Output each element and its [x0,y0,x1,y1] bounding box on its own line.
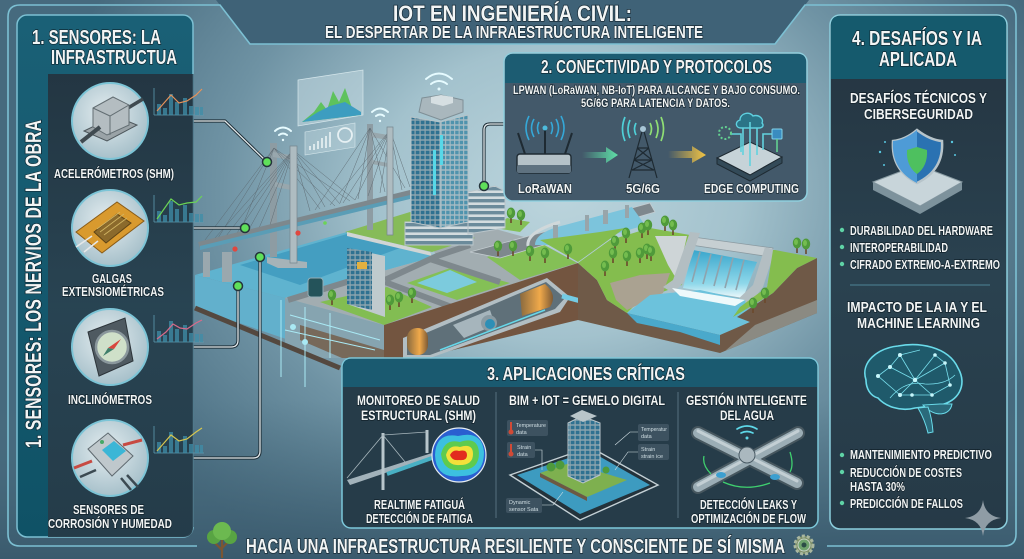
panel: 3. aplicaciones críticas [342,358,818,528]
icon: gear [795,536,813,554]
dam [655,236,687,280]
subheading: CIBERSEGURIDAD [864,106,973,123]
tall tower [405,95,473,245]
tunnel earth [384,263,578,358]
sensor: acelerómetro [72,83,148,159]
trees [328,208,810,313]
sensor: inclinómetro [72,309,148,385]
column: gestión del agua: DETECCIÓN LEAKS Y [700,497,797,512]
bridge [198,124,410,282]
heading [852,27,982,71]
subheading [850,90,987,123]
heading: APLICADA [879,49,957,71]
data tags: data [516,430,528,436]
subheading [847,299,987,332]
hill grass [578,228,690,313]
label [48,502,172,531]
conduit grid [281,300,380,387]
heading: 2. CONECTIVIDAD Y PROTOCOLOS [541,57,772,77]
annex building [468,186,505,234]
small building [347,248,385,317]
title: EL DESPERTAR DE LA INFRAESTRUCTURA INTELIGENTE [325,22,703,42]
subheading: IMPACTO DE LA IA Y EL [847,299,987,316]
panel heading [32,27,177,69]
column: SHM: MONITOREO DE SALUD [357,393,480,408]
icon: bridge with heat map [347,428,486,490]
label: LoRaWAN [518,181,572,196]
data tags: strain ice [641,454,663,460]
label: CORROSIÓN Y HUMEDAD [48,516,172,531]
data tags: sensor Sata [509,507,539,513]
column: BIM + IoT [506,393,669,520]
field sensor box [308,278,323,297]
column: gestión del agua: GESTIÓN INTELIGENTE [686,393,807,408]
data tags: data [517,452,529,458]
right bank [720,258,817,353]
data tags: Temperature [516,423,546,429]
icon: LoRaWAN router [517,116,572,173]
label: GALGAS [92,271,132,286]
title band [216,0,809,44]
bullets: IA: PREDICCIÓN DE FALLOS [850,496,963,511]
water [195,232,437,298]
floating dashboard [298,70,363,155]
column: gestión del agua: OPTIMIZACIÓN DE FLOW [691,511,807,526]
icon: tablet with digital twin [510,410,658,520]
description [513,83,800,110]
description: 5G/6G PARA LATENCIA Y DATOS. [581,96,730,110]
title [325,1,703,42]
wifi icons [275,74,452,141]
icon: smart pipes [698,426,798,487]
arrow [668,146,706,163]
column: SHM: REALTIME FATIGUÁ [374,497,465,512]
panel: 2. conectividad y protocolos [504,53,807,201]
label: EXTENSIOMÉTRICAS [62,284,164,299]
subheading: MACHINE LEARNING [857,315,980,332]
label: ACELERÓMETROS (SHM) [54,166,174,181]
column: gestión del agua: DEL AGUA [720,408,774,423]
sensor nodes [234,158,488,290]
footer [207,522,813,558]
column: gestión del agua [686,393,807,526]
column: SHM: DETECCIÓN DE FAITIGA [366,511,473,526]
arrow [582,147,618,163]
icon: neural brain [865,345,962,433]
label: INCLINÓMETROS [68,392,152,407]
description: LPWAN (LoRaWAN, NB-IoT) PARA ALCANCE Y BAJO CONSUMO. [513,83,800,97]
icon: shield on server [873,130,962,214]
panel heading: 1. SENSORES: LA [32,27,161,49]
panel heading: INFRASTRUCTUA [51,47,177,69]
column: SHM [347,393,486,526]
city ground [285,215,578,325]
panel: 4. desafíos y IA [830,15,1007,536]
connector lines from sensors to nodes [149,121,504,458]
closing statement: HACIA UNA INFRAESTRUCTURA RESILIENTE Y CONSCIENTE DE SÍ MISMA [246,535,785,558]
subheading: DESAFÍOS TÉCNICOS Y [850,90,987,107]
bullets: desafíos: INTEROPERABILIDAD [850,240,948,255]
data tags: Temperatur [641,427,667,433]
bullets: IA [840,447,992,511]
sensor: corrosión y humedad [72,420,148,496]
column: BIM + IoT: BIM + IOT = GEMELO DIGITAL [509,393,665,408]
rocks [610,273,670,310]
data tags: Dynamic [509,500,531,506]
icon: 5G tower [622,117,664,178]
label: SENSORES DE [73,502,144,517]
icon: sparkle [965,500,1001,536]
data tags: Strain [641,447,655,453]
icon: tree [207,522,237,558]
label: 5G/6G [626,181,660,196]
icon: edge computing [717,113,782,181]
heading: 3. APLICACIONES CRÍTICAS [487,363,685,384]
central illustration: smart city, bridge, tunnel and dam [195,70,817,387]
column: SHM: ESTRUCTURAL (SHM) [361,408,476,423]
bullets: IA: HASTA 30% [850,479,905,494]
data tags [506,420,669,513]
side heading: 1. SENSORES: LOS NERVIOS DE LA OBRA [21,120,46,448]
sensor: galga [72,190,148,266]
title: IOT EN INGENIERÍA CIVIL: [393,1,632,26]
reservoir [627,290,750,335]
hill earth [578,263,720,353]
label [62,271,164,299]
bullets: desafíos [840,223,1000,272]
data tags: Strain [517,445,531,451]
panel: 1. sensores [17,15,204,537]
data tags: data [641,434,653,440]
water block front [195,275,384,358]
mini charts [154,88,204,453]
bullets: IA: REDUCCIÓN DE COSTES [850,465,962,480]
label: EDGE COMPUTING [704,181,799,196]
heading: 4. DESAFÍOS Y IA [852,27,982,50]
